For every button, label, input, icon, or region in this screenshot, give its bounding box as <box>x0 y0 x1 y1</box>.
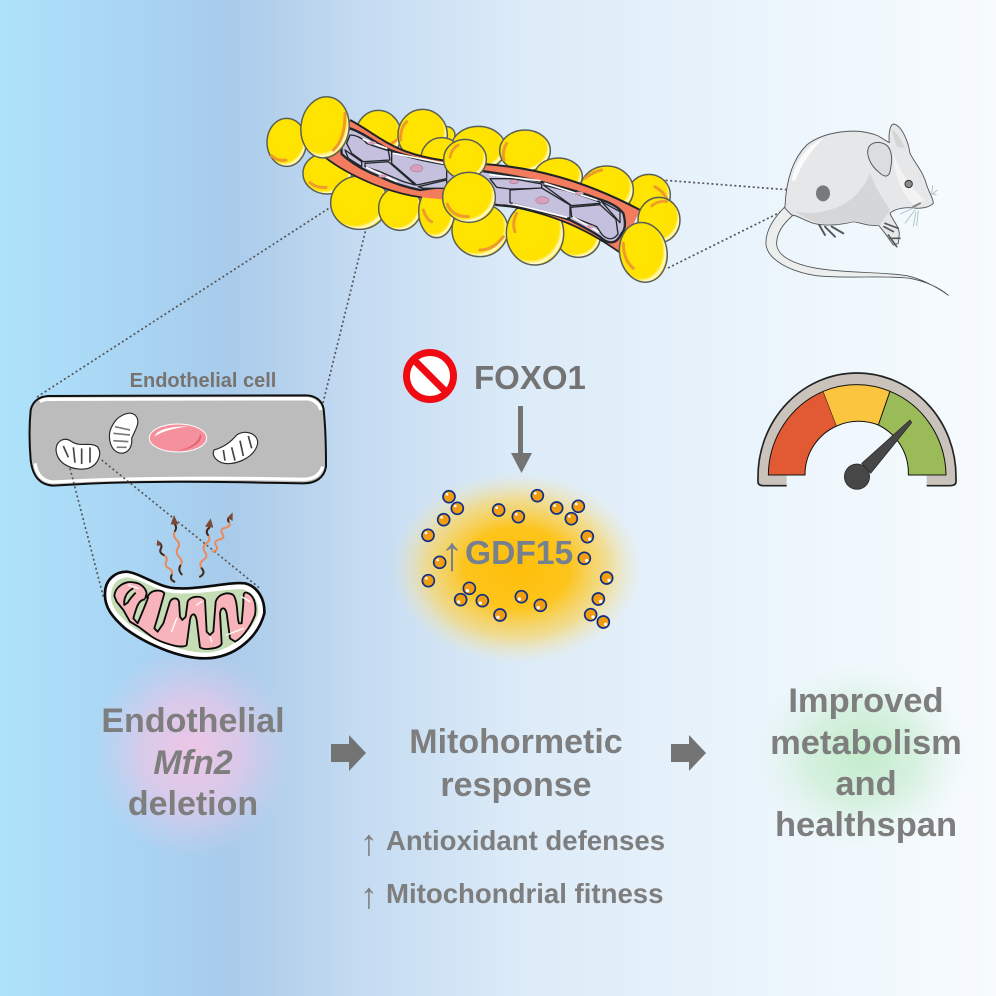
mouse tail <box>766 207 948 295</box>
mouse ear <box>868 142 892 176</box>
arrow: to improved metabolism <box>671 735 706 771</box>
label: Endothelial Mfn2 deletion: deletion <box>128 785 258 823</box>
dotted zoom lines <box>37 180 817 403</box>
particle highlights <box>425 492 611 626</box>
matrix highlights <box>128 585 250 642</box>
gauge green segment <box>878 391 946 475</box>
label: Mitohormetic response: Mitohormetic <box>409 723 623 761</box>
mouse eye <box>905 180 912 188</box>
mouse fore foot <box>884 223 900 247</box>
front adipocytes <box>297 94 680 286</box>
endothelial cell with mitochondria <box>30 395 326 486</box>
glow: green behind improved metabolism <box>754 662 970 850</box>
mouse body <box>785 124 933 245</box>
particle bodies <box>422 490 613 628</box>
small mitochondrion middle <box>109 413 138 453</box>
glow: pink behind Mfn2 deletion <box>92 646 292 858</box>
left cristae <box>124 588 148 623</box>
adipose tissue with blood vessel <box>267 94 680 286</box>
label: endothelial cell: Endothelial cell <box>130 370 276 392</box>
gauge red segment <box>768 391 837 475</box>
mouse nose <box>913 203 920 207</box>
cell highlight <box>35 399 323 482</box>
cell body <box>30 395 326 486</box>
icon: health gauge <box>758 373 956 489</box>
mouse whiskers <box>900 185 937 227</box>
label: up GDF15: ↑ <box>440 528 464 581</box>
icon: large mitochondrion <box>105 572 264 658</box>
label: Endothelial Mfn2 deletion: Endothelial <box>101 702 285 740</box>
nucleus <box>149 424 207 452</box>
label: antioxidant defenses: ↑ <box>360 822 378 863</box>
mouse highlight <box>792 138 823 182</box>
mouse fat depot marker <box>816 185 830 201</box>
endothelial cells <box>345 135 620 239</box>
label: up GDF15: GDF15 <box>465 535 573 572</box>
mouse hind foot <box>818 223 843 237</box>
back adipocytes <box>267 109 670 265</box>
GDF15 particles <box>422 490 613 628</box>
icon: mouse <box>766 124 948 295</box>
vessel lumen <box>341 128 625 242</box>
gauge yellow top line <box>823 385 890 426</box>
vessel wall <box>325 120 640 253</box>
gauge needle <box>862 420 912 473</box>
label: Improved metabolism and healthspan: and <box>835 765 897 803</box>
vessel white slits <box>363 139 598 232</box>
label: Improved metabolism and healthspan: healthspan <box>775 806 957 844</box>
glow: orange GDF15 cloud <box>391 472 643 664</box>
label: mitochondrial fitness: ↑ <box>360 875 378 916</box>
mouse far ear <box>892 130 905 148</box>
label: antioxidant defenses: Antioxidant defenses <box>386 825 665 856</box>
label: Improved metabolism and healthspan: metabolism <box>770 724 962 762</box>
mouse shading <box>795 173 890 225</box>
icon: prohibition sign <box>406 352 454 400</box>
label: Mitohormetic response: response <box>440 766 592 804</box>
label: Improved metabolism and healthspan: Improved <box>788 682 944 720</box>
small mitochondrion right <box>213 432 258 464</box>
dotted lines to large mitochondrion <box>70 460 260 597</box>
gauge rim <box>758 373 956 486</box>
matrix with cristae <box>114 582 256 649</box>
gauge yellow segment <box>823 385 890 426</box>
label: mitochondrial fitness: Mitochondrial fitness <box>386 878 664 909</box>
outer membrane <box>105 572 264 658</box>
label: FOXO1: FOXO1 <box>474 359 586 396</box>
arrow: to mitohormetic response <box>331 735 366 771</box>
gauge hub <box>844 464 870 489</box>
gauge rim outline <box>758 373 956 486</box>
icon: ROS squiggle arrows <box>157 512 233 582</box>
blood vessel <box>325 120 640 253</box>
intermembrane space <box>111 577 258 653</box>
arrow: FOXO1 to GDF15 <box>511 406 532 473</box>
small mitochondrion left <box>56 439 100 469</box>
label: Endothelial Mfn2 deletion: Mfn2 <box>153 744 233 782</box>
